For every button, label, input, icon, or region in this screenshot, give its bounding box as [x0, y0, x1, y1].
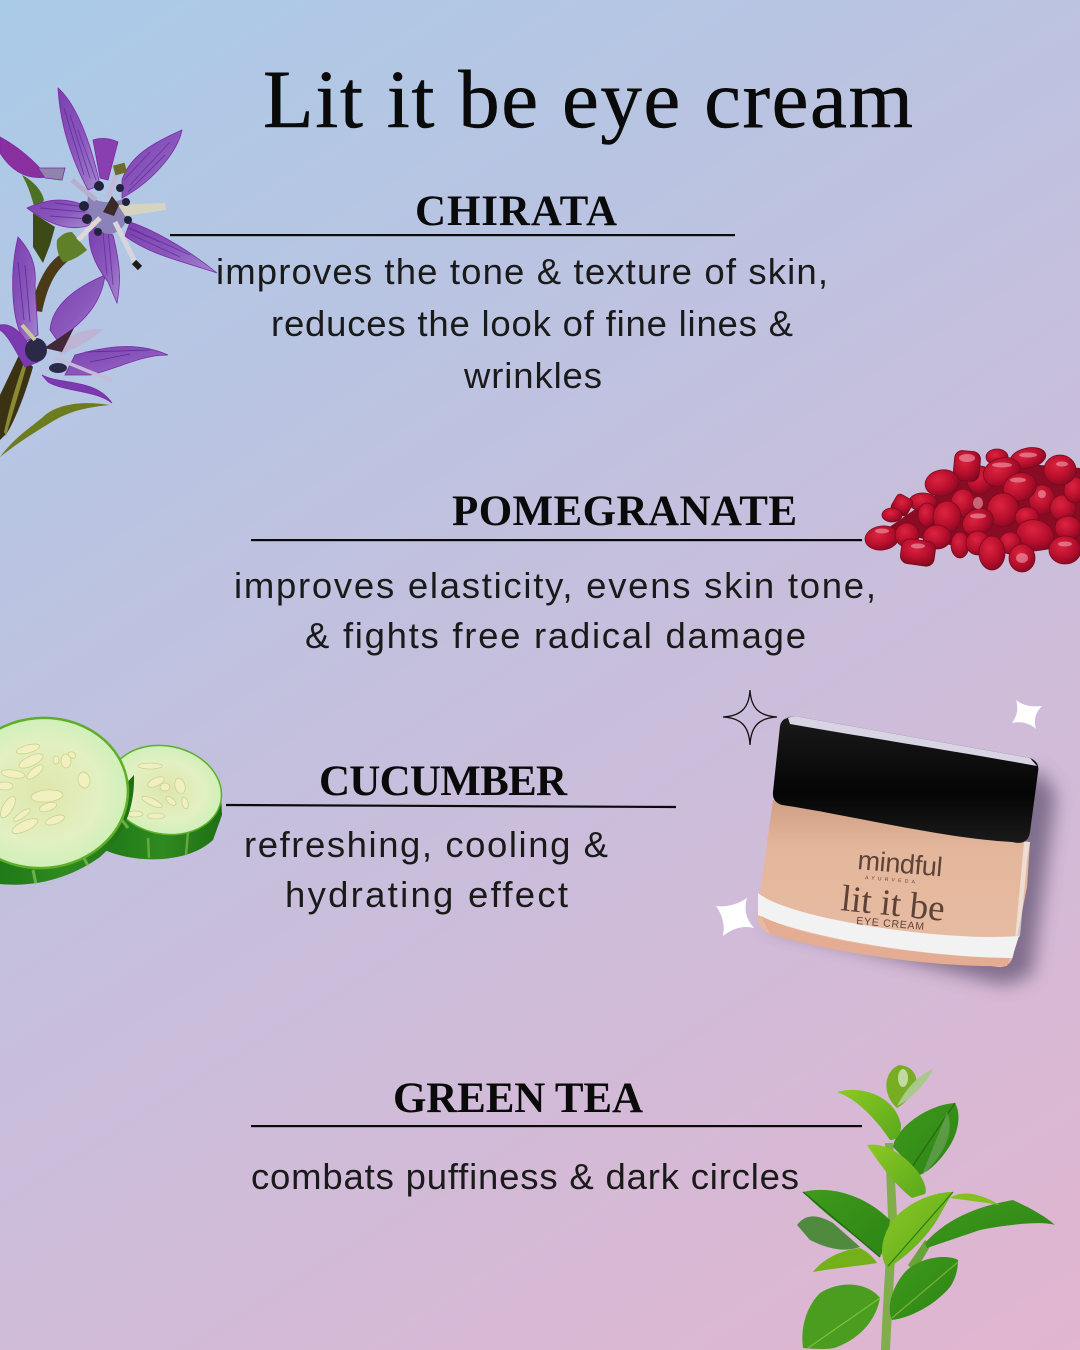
title: Lit it be eye cream — [263, 53, 913, 145]
text block: pomegranate benefits: improves elasticity, evens skin tone, — [234, 565, 876, 606]
panel: cucumber — [226, 758, 676, 915]
heading: pomegranate: POMEGRANATE — [452, 488, 797, 535]
text block: chirata benefits: wrinkles — [463, 355, 602, 396]
text block: pomegranate benefits — [234, 565, 876, 656]
text block: chirata benefits: reduces the look of fine lines & — [271, 303, 793, 344]
heading: cucumber: CUCUMBER — [319, 758, 568, 805]
panel: chirata — [170, 188, 828, 396]
text block: cucumber benefits: hydrating effect — [285, 874, 568, 915]
jar glass and cream — [757, 800, 1030, 967]
bud — [886, 1065, 916, 1108]
panel: pomegranate — [234, 488, 876, 656]
icon: pomegranate seeds — [863, 444, 1080, 572]
text block: chirata benefits — [216, 251, 828, 396]
leaves — [893, 1103, 958, 1175]
icon: cucumber slices — [0, 711, 230, 885]
lower flower — [0, 237, 168, 403]
text block: green tea benefits: combats puffiness & dark circles — [251, 1156, 799, 1197]
text block: pomegranate benefits: & fights free radical damage — [305, 615, 806, 656]
product jar — [757, 716, 1038, 967]
jar label — [839, 845, 947, 933]
jar label: AYURVEDA — [865, 875, 916, 885]
panel: green tea — [251, 1075, 862, 1197]
heading: chirata: CHIRATA — [415, 188, 617, 235]
icon: white sparkle top right — [1012, 700, 1042, 729]
text block: cucumber benefits: refreshing, cooling & — [244, 824, 608, 865]
heading: green tea: GREEN TEA — [393, 1075, 643, 1122]
jar lid — [773, 716, 1038, 843]
jar label: lit it be — [839, 878, 947, 930]
icon: outline sparkle — [723, 690, 777, 745]
icon: green tea sprig — [797, 1065, 1055, 1350]
jar label: EYE CREAM — [856, 915, 925, 933]
large slice — [0, 711, 134, 885]
jar shadow — [765, 770, 1056, 985]
icon: white sparkle left — [716, 898, 754, 936]
icon: chirata flower — [0, 88, 217, 457]
text block: cucumber benefits — [244, 824, 608, 915]
upper flower — [0, 88, 217, 303]
jar label: mindful — [856, 845, 944, 882]
small slice — [100, 735, 230, 859]
text block: chirata benefits: improves the tone & texture of skin, — [216, 251, 828, 292]
